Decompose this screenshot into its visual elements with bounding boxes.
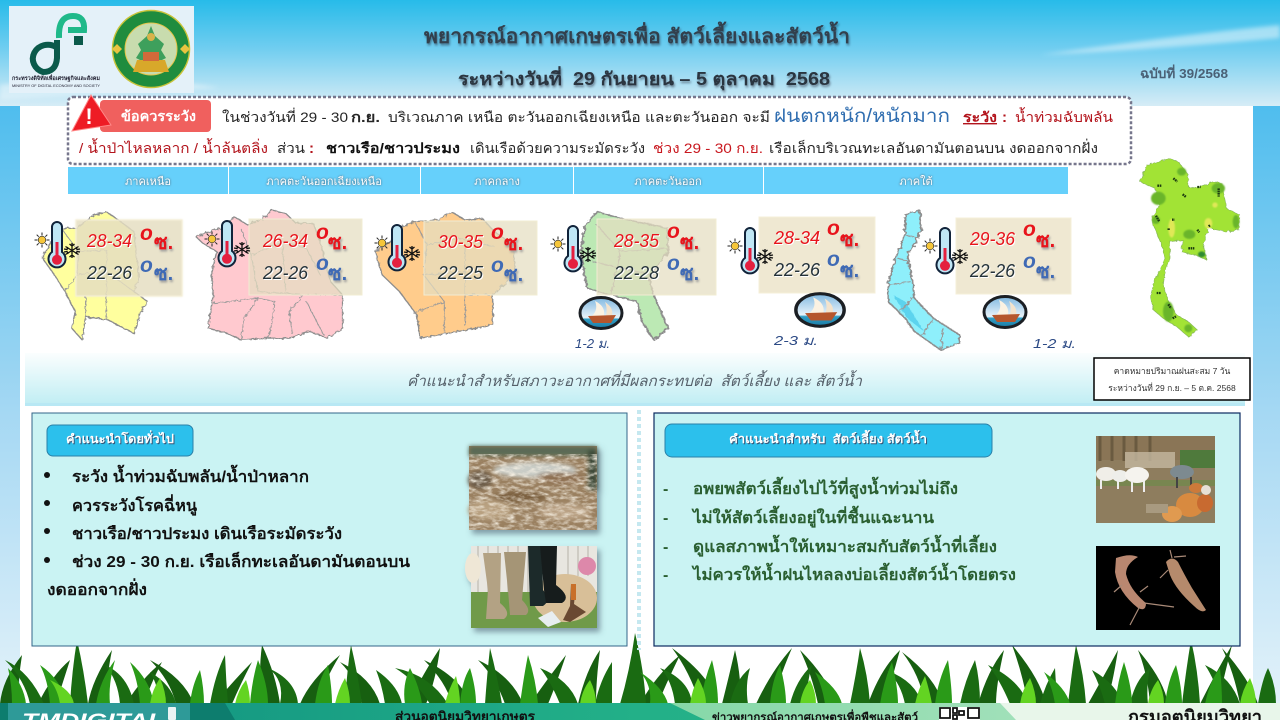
notice line 1 xyxy=(222,106,1113,127)
icon: warning triangle: ! xyxy=(85,104,93,129)
notice line 1: ระวัง xyxy=(963,109,997,125)
rainfall map caption: ระหว่างวันที่ 29 ก.ย. – 5 ต.ค. 2568 xyxy=(1108,382,1236,393)
notice line 2: เดินเรือด้วยความระมัดระวัง xyxy=(470,140,645,156)
temperature panel: east: o xyxy=(667,220,680,243)
livestock advice list: - xyxy=(663,481,668,498)
advice band heading xyxy=(25,353,1245,406)
livestock advice list xyxy=(663,476,1016,584)
temperature panel: south east coast: o xyxy=(827,217,840,240)
general advice list: ควรระวังโรคฉี่หนู xyxy=(72,494,197,517)
temperature panel: north xyxy=(76,220,182,296)
icon: thermometer north xyxy=(34,222,80,267)
icon: thermometer east xyxy=(550,226,596,271)
icon: ship south east coast xyxy=(796,294,844,326)
temperature panel: east: ซ. xyxy=(680,232,699,254)
temperature panel: south west coast: 22-26 xyxy=(969,261,1016,281)
temperature panel: central: 22-25 xyxy=(437,263,484,283)
region header row xyxy=(68,167,1068,194)
photo: flood water xyxy=(468,446,597,530)
temperature panel: north: o xyxy=(140,222,153,245)
region header row: ภาคตะวันออก xyxy=(634,176,702,188)
region header row: ภาคเหนือ xyxy=(125,175,171,188)
temperature panel: south west coast: 29-36 xyxy=(969,229,1016,249)
notice line 1: ในช่วงวันที่ 29 - 30 xyxy=(222,108,348,125)
advice band heading: คำแนะนำสำหรับสภาวะอากาศที่มีผลกระทบต่อ สัตว์เลี้ยง และ สัตว์น้ำ xyxy=(407,370,863,390)
livestock advice list: ดูแลสภาพน้ำให้เหมาะสมกับสัตว์น้ำที่เลี้ยง xyxy=(693,534,997,558)
icon: warning triangle xyxy=(72,95,111,131)
temperature panel: central: o xyxy=(491,254,504,277)
temperature panel: central xyxy=(424,221,537,295)
notice line 2: ชาวเรือ/ชาวประมง xyxy=(326,140,460,156)
temperature panel: north: ซ. xyxy=(154,232,173,254)
general advice list: ช่วง 29 - 30 ก.ย. เรือเล็กทะเลอันดามันตอนบน xyxy=(72,550,410,571)
temperature panel: south west coast: o xyxy=(1023,250,1036,273)
region header row: ภาคกลาง xyxy=(474,176,520,188)
temperature panel: northeast xyxy=(249,219,362,295)
notice line 2: ส่วน xyxy=(277,140,305,156)
temperature panel: northeast: 26-34 xyxy=(262,231,308,251)
temperature panel: northeast: ซ. xyxy=(328,232,347,254)
wave height south east coast: 2-3 ม. xyxy=(773,333,818,348)
temperature panel: north: 28-34 xyxy=(86,231,132,251)
heading: livestock and aquatic animals xyxy=(665,424,992,457)
livestock advice list: - xyxy=(663,510,668,527)
icon: digital economy ministry logo: กระทรวงดิจิทัลเพื่อเศรษฐกิจและสังคม xyxy=(12,74,100,82)
temperature panel: south east coast: ซ. xyxy=(840,229,859,251)
rainfall map caption: คาดหมายปริมาณฝนสะสม 7 วัน xyxy=(1114,366,1230,376)
photo: rubber boots xyxy=(465,546,597,628)
map: Thailand accumulated rainfall xyxy=(1140,158,1240,337)
temperature panel: central: ซ. xyxy=(504,233,523,255)
notice line 2: ช่วง 29 - 30 ก.ย. xyxy=(653,140,763,156)
map: central region xyxy=(375,212,515,338)
livestock advice list: อพยพสัตว์เลี้ยงไปไว้ที่สูงน้ำท่วมไม่ถึง xyxy=(693,476,958,500)
digital logo xyxy=(0,703,235,720)
general advice list: ระวัง น้ำท่วมฉับพลัน/น้ำป่าหลาก xyxy=(72,464,309,486)
temperature panel: south east coast: ซ. xyxy=(840,260,859,282)
icon: thermometer south east coast xyxy=(728,228,773,273)
notice line 1: น้ำท่วมฉับพลัน xyxy=(1015,107,1113,125)
issue number: ฉบับที่ 39/2568 xyxy=(1140,64,1228,81)
map: eastern region xyxy=(580,212,668,340)
map: northern region xyxy=(42,212,148,340)
photo: goats and chickens xyxy=(1096,436,1215,523)
region header row: ภาคตะวันออกเฉียงเหนือ xyxy=(266,175,382,188)
temperature panel: east: o xyxy=(667,252,680,275)
notice line 2: / น้ำป่าไหลหลาก / น้ำล้นตลิ่ง xyxy=(79,138,268,156)
temperature panel: south west coast xyxy=(956,218,1071,294)
logos panel xyxy=(9,6,194,93)
icon: digital economy ministry logo: MINISTRY OF DIGITAL ECONOMY AND SOCIETY xyxy=(12,83,100,88)
notice line 2: เรือเล็กบริเวณทะเลอันดามันตอนบน งดออกจากฝั่ง xyxy=(769,139,1098,156)
temperature panel: northeast: ซ. xyxy=(328,263,347,285)
heading: general advice: คำแนะนำโดยทั่วไป xyxy=(66,430,174,446)
temperature panel: central: 30-35 xyxy=(438,232,484,252)
icon: thermometer central xyxy=(374,225,420,270)
general advice list xyxy=(44,464,410,599)
livestock advice list: - xyxy=(663,567,668,584)
temperature panel: east: 22-28 xyxy=(613,263,659,283)
notice line 1: ก.ย. xyxy=(351,109,380,125)
heading: livestock and aquatic animals: คำแนะนำสำหรับ สัตว์เลี้ยง สัตว์น้ำ xyxy=(729,429,927,446)
temperature panel: central: o xyxy=(491,221,504,244)
panel: warning notice xyxy=(68,95,1131,164)
temperature panel: northeast: 22-26 xyxy=(262,263,309,283)
notice line 2: : xyxy=(309,140,314,157)
temperature panel: north: ซ. xyxy=(154,263,173,285)
icon: thermometer northeast xyxy=(204,221,250,266)
map: southern region xyxy=(888,210,959,350)
photo: catfish xyxy=(1096,546,1220,630)
wave height east: 1-2 ม. xyxy=(575,336,610,351)
icon: thermometer south west coast xyxy=(922,228,968,273)
subtitle: date range: ระหว่างวันที่ 29 กันยายน – 5 ตุลาคม 2568 xyxy=(458,66,830,91)
panel: livestock and aquatic animal advice xyxy=(654,413,1240,646)
temperature panel: south west coast: ซ. xyxy=(1036,261,1055,283)
grass xyxy=(0,633,1276,704)
temperature panel: south east coast xyxy=(759,217,875,293)
title: พยากรณ์อากาศเกษตรเพื่อ สัตว์เลี้ยงและสัตว์น้ำ xyxy=(424,21,850,48)
icon: meteorological department seal xyxy=(112,10,190,88)
icon: QR code xyxy=(939,707,980,720)
livestock advice list: ไม่ควรให้น้ำฝนไหลลงบ่อเลี้ยงสัตว์น้ำโดยตรง xyxy=(691,562,1016,584)
temperature panel: south west coast: ซ. xyxy=(1036,230,1055,252)
temperature panel: south west coast: o xyxy=(1023,218,1036,241)
livestock advice list: ไม่ให้สัตว์เลี้ยงอยู่ในที่ชื้นแฉะนาน xyxy=(691,505,934,529)
temperature panel: south east coast: o xyxy=(827,248,840,271)
temperature panel: south east coast: 22-26 xyxy=(773,260,821,280)
footer bar xyxy=(0,703,1280,720)
region header row: ภาคใต้ xyxy=(899,175,933,188)
general advice list: งดออกจากฝั่ง xyxy=(47,578,147,599)
icon: ship south west coast xyxy=(984,296,1026,328)
notice line 1: ฝนตกหนัก/หนักมาก xyxy=(774,106,950,127)
temperature panel: north: 22-26 xyxy=(86,263,133,283)
wave height south west coast: 1-2 ม. xyxy=(1033,336,1076,351)
temperature panel: east: ซ. xyxy=(680,263,699,285)
notice line 1: : xyxy=(1002,109,1007,126)
temperature panel: north: o xyxy=(140,254,153,277)
temperature panel: northeast: o xyxy=(316,221,329,244)
rainfall map caption xyxy=(1094,358,1250,400)
warning label: ข้อควรระวัง xyxy=(121,108,196,124)
temperature panel: northeast: o xyxy=(316,252,329,275)
notice line 1: บริเวณภาค เหนือ ตะวันออกเฉียงเหนือ และตะวันออก จะมี xyxy=(388,109,770,125)
icon: ship east xyxy=(580,298,622,328)
divider between panels xyxy=(637,410,641,650)
notice line 2 xyxy=(79,138,1098,157)
livestock advice list: - xyxy=(663,539,668,556)
warning label xyxy=(100,100,211,132)
panel: general advice xyxy=(32,413,627,646)
temperature panel: east: 28-35 xyxy=(613,231,660,251)
icon: digital economy ministry logo xyxy=(12,16,100,88)
heading: general advice xyxy=(47,425,193,456)
temperature panel: east xyxy=(597,219,716,295)
temperature panel: central: ซ. xyxy=(504,264,523,286)
general advice list: ชาวเรือ/ชาวประมง เดินเรือระมัดระวัง xyxy=(72,525,342,543)
map: northeastern region xyxy=(196,210,343,340)
temperature panel: south east coast: 28-34 xyxy=(773,228,820,248)
